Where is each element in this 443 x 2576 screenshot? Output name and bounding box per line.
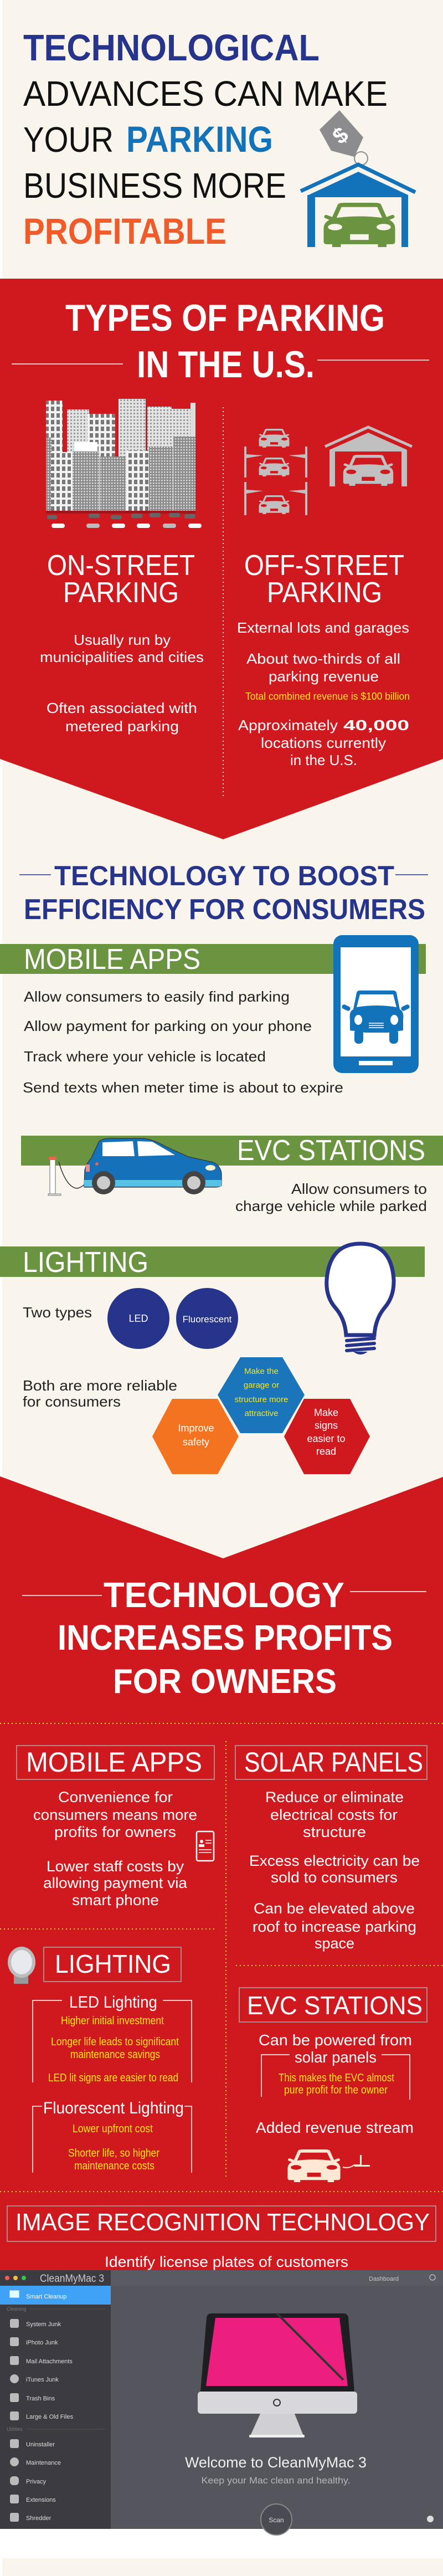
text: mobile apps profits: profits for owners [54,1824,176,1840]
title [23,27,388,252]
box: EVC stations: EVC STATIONS [247,1991,423,2020]
text: mobile apps profits: Convenience for [58,1789,173,1805]
text: two types: Two types [23,1304,92,1321]
bracket: LED lighting: LED Lighting [69,1993,157,2011]
text: mobile apps profits [33,1789,197,1908]
bracket: fluorescent lighting: Lower upfront cost [73,2123,153,2135]
text: solar panel benefits: Can be elevated above [254,1900,415,1917]
on-street parking column: metered parking [65,718,179,735]
red section: owners [0,1476,443,2270]
bracket: LED lighting: maintenance savings [70,2049,160,2061]
hexagon: make structure attractive: attractive [245,1409,278,1418]
text: solar panel benefits: electrical costs for [270,1807,398,1823]
list: mobile app benefits: Allow payment for parking on your phone [24,1018,312,1034]
text: EVC owner benefits: Can be powered from [259,2031,412,2049]
title: ADVANCES CAN MAKE [23,74,388,114]
title: TECHNOLOGICAL [23,27,320,69]
circle: LED [107,1288,169,1349]
title: BUSINESS MORE [23,166,286,206]
banner: mobile apps: MOBILE APPS [24,943,200,976]
text: solar panel benefits [249,1789,420,1952]
icon: small tablet [197,1831,214,1861]
bracket: fluorescent lighting: Shorter life, so higher [68,2147,159,2159]
heading: technology increases profits for owners: FOR OWNERS [113,1662,337,1701]
screenshot: CleanMyMac app: Mail Attachments [26,2358,73,2365]
heading: types of parking: TYPES OF PARKING [65,297,385,339]
on-street parking column: Usually run by [74,632,171,648]
off-street parking column: in the U.S. [290,752,357,768]
screenshot: CleanMyMac app: Privacy [26,2478,47,2485]
text: both more reliable: for consumers [23,1393,121,1410]
icon: electric car charging [48,1138,222,1195]
text: mobile apps profits: consumers means more [33,1807,197,1823]
box: image recognition technology: IMAGE RECOGNITION TECHNOLOGY [16,2209,430,2236]
screenshot: CleanMyMac app: CleanMyMac 3 [40,2273,104,2285]
screenshot: CleanMyMac app: Extensions [26,2497,56,2503]
screenshot: CleanMyMac app: iPhoto Junk [26,2339,58,2346]
hexagon: improve safety [152,1399,239,1474]
text: solar panel benefits: sold to consumers [271,1869,398,1886]
hexagon: make structure attractive: structure more [235,1395,288,1404]
icon: garage with price tag: $ [328,122,353,149]
screenshot: CleanMyMac app: Maintenance [26,2460,61,2466]
text: EVC owner benefits [256,2031,414,2136]
hexagon: improve safety: Improve [178,1423,214,1434]
screenshot: CleanMyMac app: Cleaning [7,2306,27,2312]
screenshot: CleanMyMac app: Uninstaller [26,2441,55,2448]
list: mobile app benefits: Track where your vehicle is located [24,1048,266,1065]
heading: technology increases profits for owners: INCREASES PROFITS [58,1618,393,1658]
text: solar panel benefits: Excess electricity can be [249,1853,420,1869]
bracket: LED lighting: Higher initial investment [61,2015,164,2027]
text: solar panel benefits: structure [303,1824,366,1840]
off-street parking column: locations currently [261,735,386,751]
hexagon: make signs easier to read [284,1399,370,1474]
title: PROFITABLE [23,211,226,252]
off-street parking column: External lots and garages [237,619,409,636]
list: mobile app benefits: Send texts when meter time is about to expire [23,1079,343,1096]
screenshot: CleanMyMac app: Scan [269,2516,284,2524]
banner: lighting: LIGHTING [23,1246,148,1279]
on-street parking column: PARKING [63,577,179,609]
text: solar panel benefits: space [315,1935,354,1952]
off-street parking column: Approximately [238,717,338,733]
bracket: fluorescent lighting: maintenance costs [74,2160,154,2172]
off-street parking column: 40,000 [343,717,409,733]
text: EVC owner benefits: pure profit for the owner [284,2084,388,2096]
illustration: city buildings [46,399,202,528]
heading: technology to boost efficiency: TECHNOLOGY TO BOOST [54,860,394,891]
text: identify license plates: Identify license plates of customers [105,2254,348,2270]
screenshot: CleanMyMac app: Welcome to CleanMyMac 3 [185,2454,367,2471]
box: mobile apps: MOBILE APPS [26,1747,202,1778]
icon: phone with car [333,935,419,1073]
bracket: LED lighting [33,1993,192,2084]
hexagon: make structure attractive: garage or [244,1381,279,1390]
hexagon: make structure attractive: Make the [244,1367,279,1376]
on-street parking column: municipalities and cities [40,649,204,665]
screenshot: CleanMyMac app: Trash Bins [26,2395,55,2402]
heading: technology to boost efficiency [19,860,428,926]
text: solar panel benefits: roof to increase parking [253,1918,416,1935]
hexagon: make structure attractive [218,1357,305,1433]
icon: stacked parking lift [244,429,307,515]
text: mobile apps profits: smart phone [72,1892,159,1908]
bracket: fluorescent lighting [33,2099,192,2173]
hexagon: make signs easier to read: read [316,1446,336,1457]
screenshot: CleanMyMac app: iTunes Junk [26,2377,59,2383]
text: both more reliable [23,1377,177,1410]
screenshot: CleanMyMac app: Dashboard [369,2276,399,2282]
hexagon: make signs easier to read: Make [314,1407,338,1418]
off-street parking column [237,550,410,768]
text: EVC consumer benefit [235,1181,427,1214]
heading: technology increases profits for owners [22,1575,426,1701]
hexagon: make signs easier to read: easier to [307,1433,346,1444]
text: EVC owner benefits: This makes the EVC almost [279,2072,394,2084]
off-street parking column: PARKING [267,577,382,609]
text: EVC consumer benefit: charge vehicle while parked [235,1198,427,1214]
background beige [2,0,443,1558]
screenshot: CleanMyMac app: Shredder [26,2515,51,2522]
off-street parking column: parking revenue [269,668,379,685]
off-street parking column: Total combined revenue is $100 billion [245,691,410,702]
on-street parking column: Often associated with [47,700,197,716]
icon: lamp [8,1947,35,1984]
screenshot: CleanMyMac app: Keep your Mac clean and healthy. [202,2475,350,2486]
screenshot: CleanMyMac app: System Junk [26,2321,61,2328]
icon: car with charger [287,2149,370,2182]
circle: Fluorescent [176,1288,238,1349]
bracket: fluorescent lighting: Fluorescent Lighting [43,2099,184,2117]
text: mobile apps profits: allowing payment via [43,1875,188,1891]
text: EVC owner benefits: Added revenue stream [256,2119,414,2136]
icon: light bulb [327,1244,394,1354]
hexagon: improve safety: safety [183,1436,209,1448]
screenshot: CleanMyMac app: Large & Old Files [26,2414,73,2420]
heading: types of parking: IN THE U.S. [137,343,315,386]
on-street parking column [40,550,204,735]
icon: gray garage [325,427,412,486]
heading: types of parking [12,297,429,386]
text: solar panel benefits: Reduce or eliminate [265,1789,404,1805]
banner: mobile apps [0,943,426,976]
box: lighting: LIGHTING [55,1949,171,1978]
red section: types of parking [0,279,443,839]
bracket: LED lighting: Longer life leads to significant [51,2036,179,2048]
title: PARKING [126,119,273,160]
off-street parking column: About two-thirds of all [246,650,400,667]
screenshot: CleanMyMac app [0,2270,443,2535]
circle: Fluorescent: Fluorescent [183,1314,232,1325]
banner: lighting [0,1246,425,1279]
banner: EVC stations: EVC STATIONS [237,1135,425,1167]
bracket: LED lighting: LED lit signs are easier to read [48,2072,178,2084]
screenshot: CleanMyMac app: Smart Cleanup [26,2293,66,2300]
text: both more reliable: Both are more reliable [23,1377,177,1394]
title: YOUR [23,120,114,160]
text: EVC consumer benefit: Allow consumers to [291,1181,427,1197]
on-street parking column: ON-STREET [47,550,195,582]
list: mobile app benefits [23,988,343,1096]
hexagon: make signs easier to read: signs [315,1420,338,1431]
banner: EVC stations [21,1135,443,1167]
icon: garage with price tag [301,110,415,247]
heading: technology increases profits for owners: TECHNOLOGY [104,1575,344,1615]
screenshot: CleanMyMac app: Utilities [7,2426,23,2432]
text: EVC owner benefits: solar panels [295,2049,377,2066]
off-street parking column: OFF-STREET [244,550,404,582]
circle: LED: LED [128,1313,148,1324]
list: mobile app benefits: Allow consumers to easily find parking [24,988,290,1005]
text: mobile apps profits: Lower staff costs by [47,1858,184,1875]
